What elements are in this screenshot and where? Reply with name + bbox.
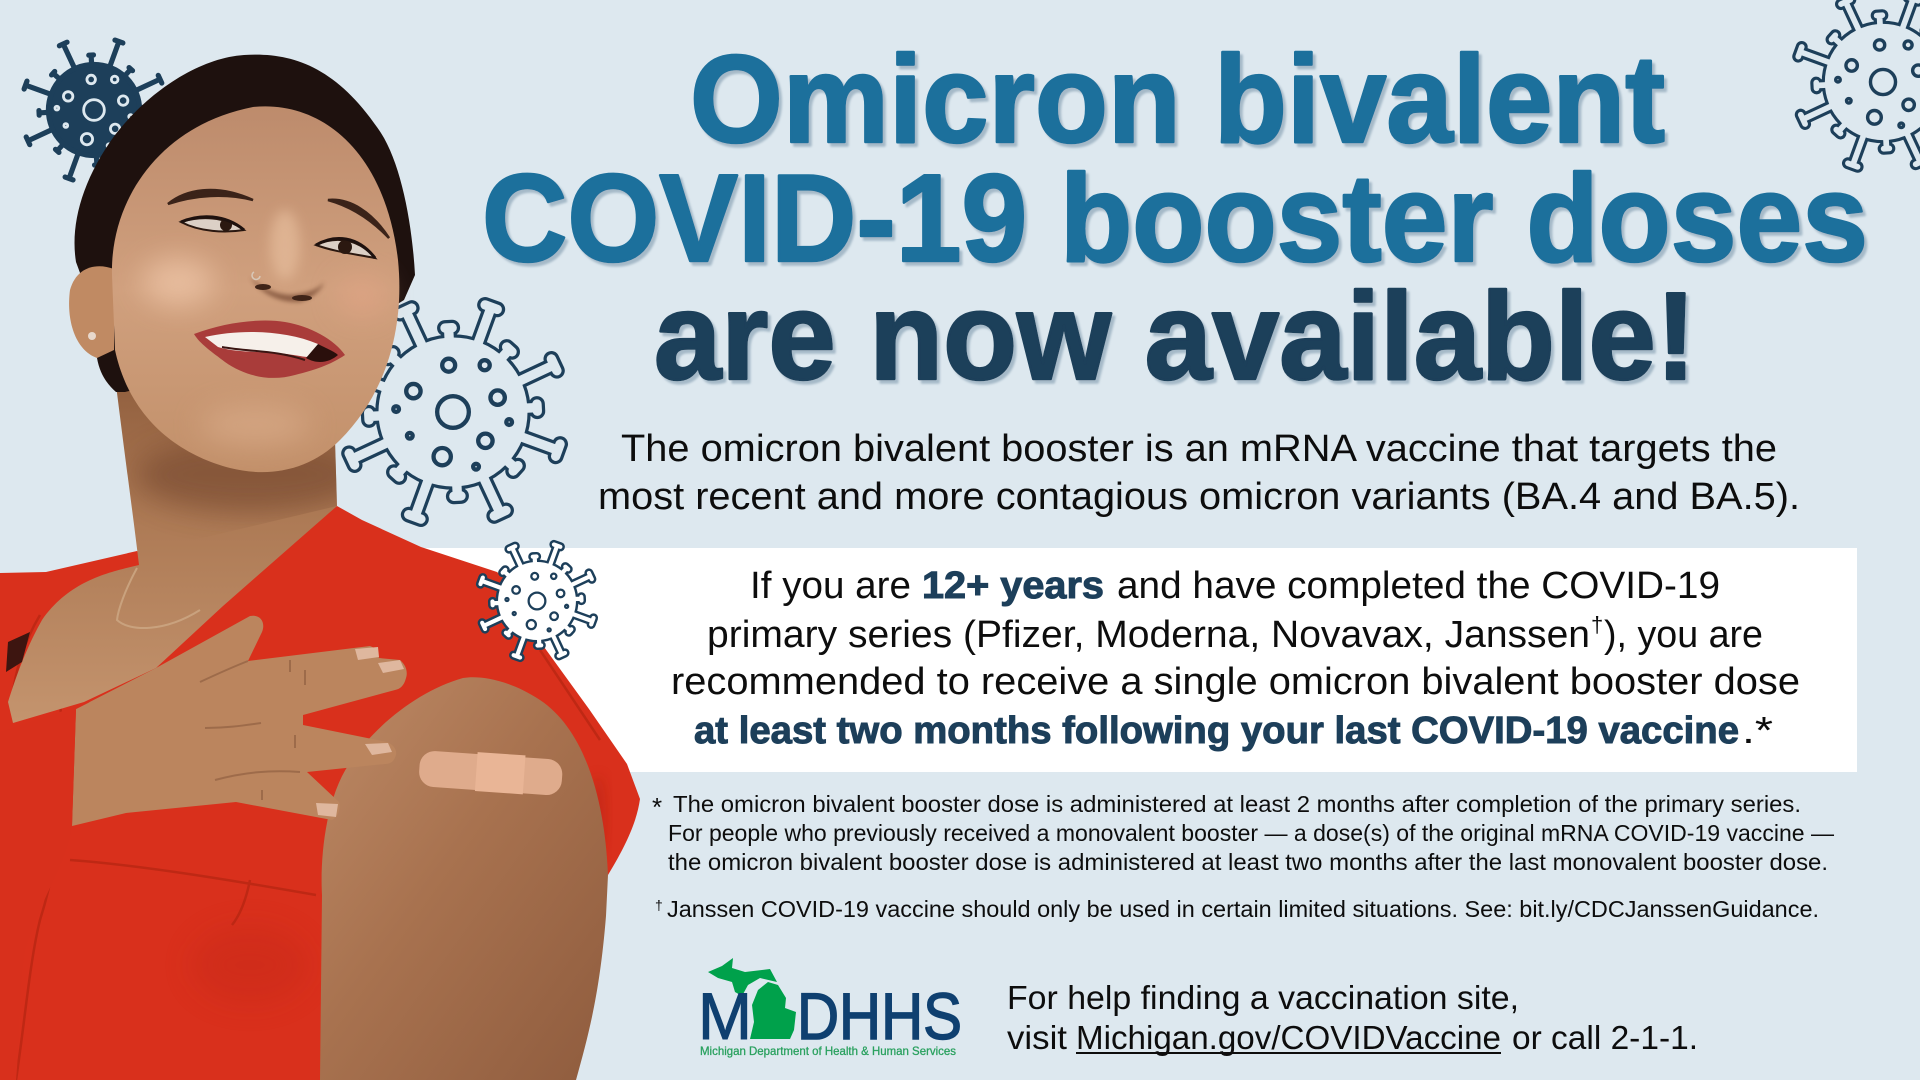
title: are now available! xyxy=(654,268,1696,406)
logo: MDHHS: M xyxy=(698,979,752,1053)
icon: large outlined virus xyxy=(346,305,560,519)
footnotes: the omicron bivalent booster dose is administered at least two months after the last monovalent booster dose. xyxy=(668,849,1828,875)
callout text: ), you are xyxy=(1604,614,1763,656)
title: Omicron bivalent xyxy=(690,31,1665,169)
person: woman with bandage xyxy=(0,55,640,1080)
mouth xyxy=(194,320,345,378)
nose xyxy=(250,272,324,302)
sleeve cuff xyxy=(0,702,90,1080)
logo: MDHHS xyxy=(698,958,962,1058)
callout text: and have completed the COVID-19 xyxy=(1117,565,1720,607)
chin shadow xyxy=(135,437,365,513)
intro paragraph: most recent and more contagious omicron variants (BA.4 and BA.5). xyxy=(598,476,1800,518)
white callout panel xyxy=(420,548,1857,772)
logo: MDHHS: DHHS xyxy=(797,979,962,1053)
neck and chest xyxy=(8,385,337,723)
help text: or call 2-1-1. xyxy=(1512,1019,1698,1056)
callout text: .* xyxy=(1742,710,1773,752)
ear xyxy=(69,266,114,358)
intro paragraph xyxy=(598,428,1800,518)
eyebrows xyxy=(168,190,253,204)
callout text: recommended to receive a single omicron bivalent booster dose xyxy=(671,661,1800,703)
eyes xyxy=(181,217,375,258)
title: COVID-19 booster doses xyxy=(482,150,1868,288)
icon: small virus on shoulder xyxy=(480,544,594,658)
callout text: 12+ years xyxy=(922,565,1104,607)
Michigan map xyxy=(708,958,796,1039)
footnotes: For people who previously received a monovalent booster — a dose(s) of the original mRNA COVID-19 vaccine — xyxy=(668,820,1834,846)
footnotes: † xyxy=(655,897,663,913)
bandage xyxy=(418,748,563,797)
callout text: † xyxy=(1591,612,1603,637)
help text: For help finding a vaccination site, xyxy=(1007,979,1519,1016)
help text xyxy=(1007,979,1698,1056)
arm xyxy=(320,677,608,1080)
footnotes: * xyxy=(652,792,662,822)
sleeve gap xyxy=(6,632,30,672)
shirt folds xyxy=(12,615,600,1080)
help text: visit xyxy=(1007,1019,1067,1056)
logo: MDHHS: Michigan Department of Health & Human Services xyxy=(700,1044,956,1058)
footnotes: Janssen COVID-19 vaccine should only be used in certain limited situations. See: bit.ly/CDCJanssenGuidance. xyxy=(667,896,1819,922)
hand xyxy=(72,616,407,826)
footnotes xyxy=(652,791,1834,922)
hair xyxy=(75,55,415,392)
callout text: primary series (Pfizer, Moderna, Novavax, Janssen xyxy=(707,614,1590,656)
icon: filled dark virus xyxy=(24,40,164,180)
callout text xyxy=(671,565,1800,752)
help text: Michigan.gov/COVIDVaccine xyxy=(1076,1019,1501,1056)
shirt xyxy=(0,506,640,1080)
icon: virus top right xyxy=(1798,0,1920,167)
fingernails xyxy=(316,647,404,817)
earring xyxy=(88,332,96,340)
face xyxy=(112,106,399,472)
title xyxy=(482,31,1868,406)
intro paragraph: The omicron bivalent booster is an mRNA vaccine that targets the xyxy=(621,428,1777,470)
finger lines xyxy=(200,660,305,800)
callout text: If you are xyxy=(750,565,911,607)
necklace xyxy=(117,568,200,628)
callout text: at least two months following your last COVID-19 vaccine xyxy=(694,710,1739,752)
footnotes: The omicron bivalent booster dose is administered at least 2 months after completion of the primary series. xyxy=(673,791,1801,817)
